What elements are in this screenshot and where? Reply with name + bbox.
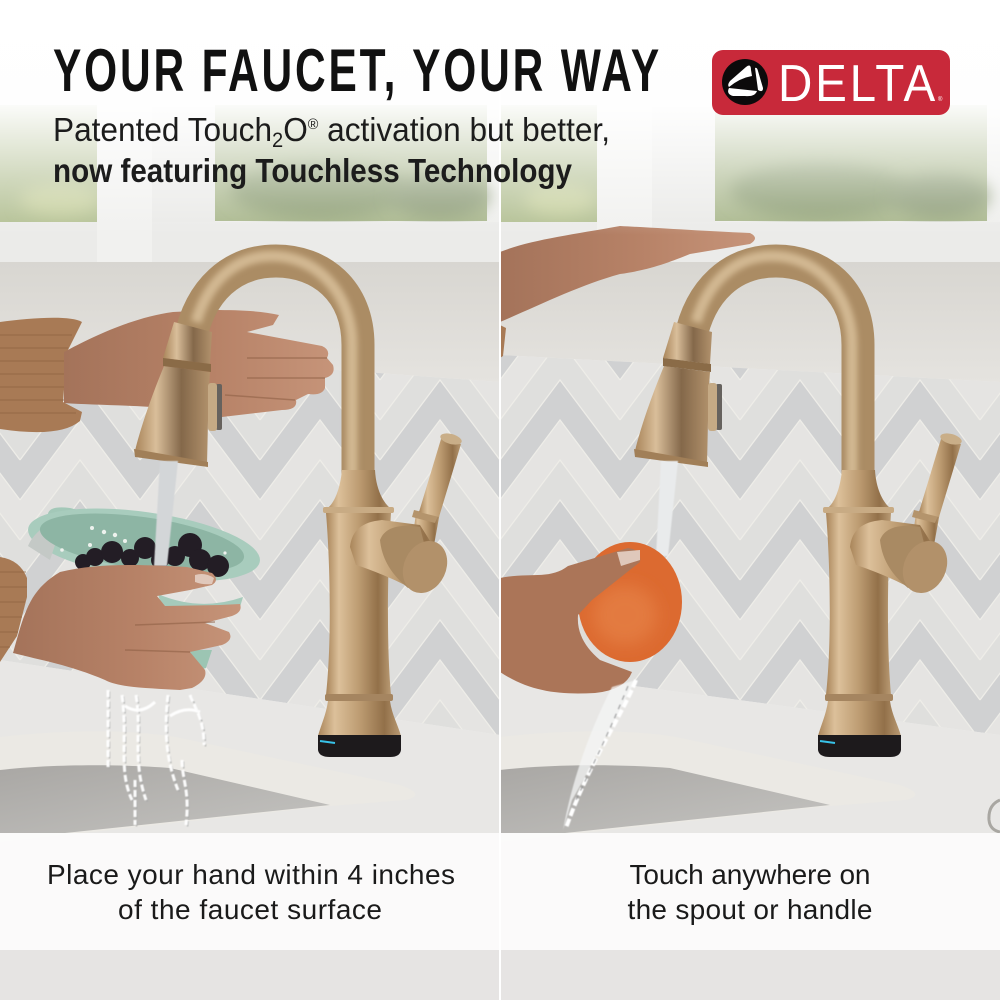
left water stream	[154, 461, 178, 566]
caption: right	[628, 859, 872, 925]
caption: left: Place your hand within 4 inches	[47, 859, 455, 890]
right splash	[563, 680, 636, 830]
left water drips	[108, 690, 206, 826]
logo: Delta	[712, 50, 950, 115]
right water stream	[656, 461, 678, 556]
right faucet	[634, 256, 963, 757]
panel: right kitchen scene	[500, 0, 1000, 1000]
colander with berries	[24, 496, 264, 672]
logo wordmark: DELTA	[778, 55, 938, 113]
sweater cuff lower left	[0, 557, 27, 662]
caption: left: of the faucet surface	[118, 894, 382, 925]
caption: right: Touch anywhere on	[630, 859, 870, 890]
counter	[0, 660, 500, 1000]
orange	[578, 542, 682, 662]
caption band	[0, 833, 1000, 950]
icon: Delta triangle mark	[722, 59, 768, 105]
caption: left	[47, 859, 455, 925]
title: YOUR FAUCET, YOUR WAY	[53, 37, 662, 104]
subtitle: now featuring Touchless Technology	[53, 152, 573, 189]
tile backsplash	[0, 345, 500, 735]
caption: right: the spout or handle	[628, 894, 872, 925]
left faucet	[134, 256, 463, 757]
white header fade	[0, 0, 1000, 235]
upper cabinet band	[0, 262, 500, 382]
right upper hand	[500, 226, 755, 358]
soap dispenser edge	[989, 800, 1000, 832]
logo wordmark: ®	[938, 96, 943, 103]
subtitle: 2	[272, 129, 283, 152]
subtitle: Patented Touch	[53, 111, 282, 148]
window views	[0, 105, 490, 222]
sweater cuff upper left	[0, 318, 82, 432]
left upper hand	[64, 310, 334, 417]
sink	[0, 731, 415, 842]
subtitle: ®	[308, 116, 318, 133]
subtitle	[53, 111, 610, 189]
left lower hand	[13, 565, 241, 690]
subtitle: activation but better,	[318, 111, 610, 148]
subtitle: O	[283, 111, 308, 148]
right lower hand	[500, 548, 640, 694]
panel: left kitchen scene	[0, 0, 500, 1000]
